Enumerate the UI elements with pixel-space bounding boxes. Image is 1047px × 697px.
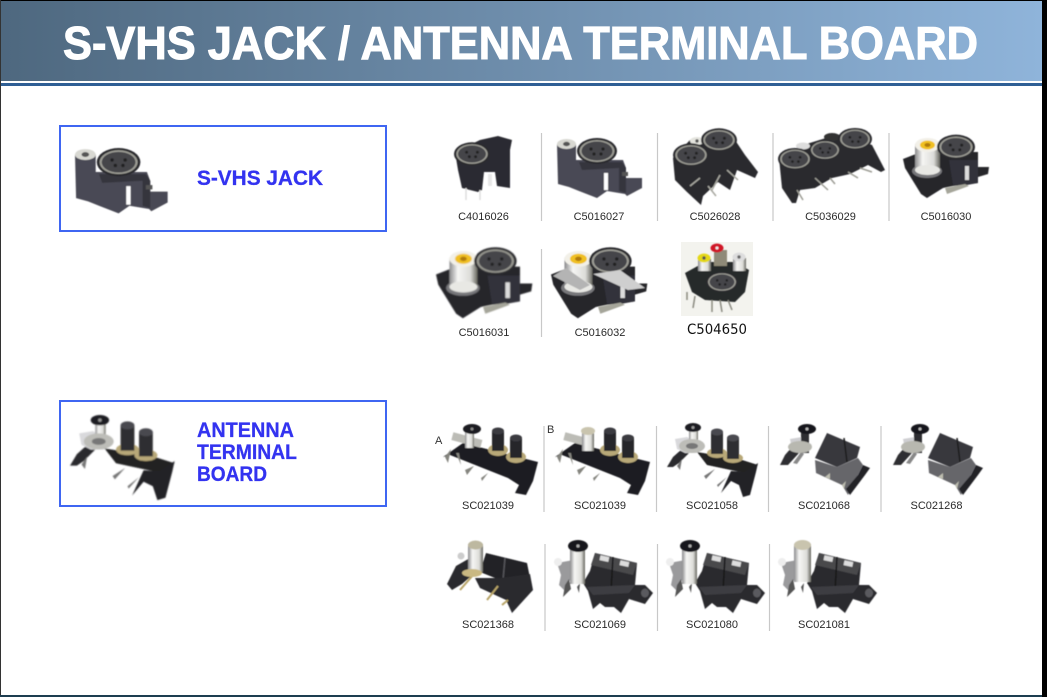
category heading: ANTENNA TERMINAL BOARD [197,419,297,486]
product: SC021081 [778,540,877,631]
product grid: antenna terminal boards [435,423,983,631]
product: C504650: C504650 [687,322,747,338]
product: C5016032 [551,247,647,339]
panel: antenna terminal board category [60,401,386,506]
product: SC021039 A [435,424,538,512]
product: C504650 [681,242,753,338]
product: SC021039 B: SC021039 [574,500,626,512]
product: SC021080 [666,540,765,631]
product: C5036029: C5036029 [805,211,856,223]
panel: S-VHS jack category [60,126,386,231]
product: SC021039 B [547,424,650,512]
product: C5016032: C5016032 [575,327,625,339]
product: C5016031: C5016031 [459,327,509,339]
product: SC021039 B: B [547,424,554,436]
product: SC021068: SC021068 [798,500,850,512]
icon: antenna terminal board [70,415,175,500]
product: C5016027 [557,138,642,223]
title: S-VHS JACK / ANTENNA TERMINAL BOARD [63,17,978,69]
product: SC021081: SC021081 [798,619,850,631]
icon: S-VHS jack [75,148,168,213]
product: SC021069 [554,540,653,631]
category heading: S-VHS JACK: S-VHS JACK [197,167,323,190]
product: C4016026: C4016026 [458,211,509,223]
category heading: ANTENNA TERMINAL BOARD: ANTENNA [197,419,294,442]
product: SC021058 [667,423,758,512]
product: SC021080: SC021080 [686,619,738,631]
product: SC021069: SC021069 [574,619,626,631]
product: SC021068 [780,424,870,512]
product: C5016030: C5016030 [921,211,971,223]
category heading: ANTENNA TERMINAL BOARD: TERMINAL [197,441,297,464]
product: SC021039 A: A [435,435,443,447]
product: C5026028: C5026028 [690,211,740,223]
product: C5036029 [778,128,885,223]
product: C5016030 [903,135,989,223]
product: SC021268 [893,424,983,512]
product: C5026028 [673,128,758,223]
category heading: ANTENNA TERMINAL BOARD: BOARD [197,463,267,486]
product: C4016026 [454,136,512,223]
product: SC021368: SC021368 [462,619,514,631]
product: SC021039 A: SC021039 [462,500,514,512]
product: SC021058: SC021058 [686,500,738,512]
product: C5016031 [436,247,532,339]
product: C5016027: C5016027 [574,211,624,223]
title banner [1,1,1042,86]
product: SC021368 [447,540,533,631]
product: SC021268: SC021268 [910,500,962,512]
product grid: S-VHS jacks [436,128,989,339]
